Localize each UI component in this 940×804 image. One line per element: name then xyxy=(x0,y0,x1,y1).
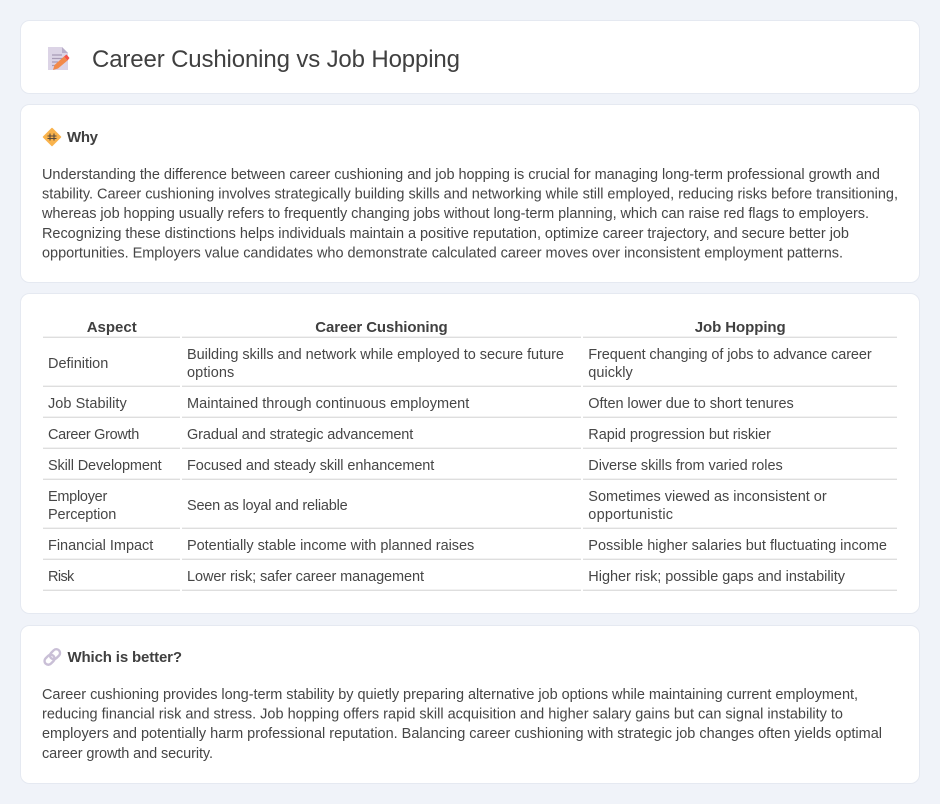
row: financial impact: Possible higher salaries but fluctuating income xyxy=(588,538,887,554)
heading: why: Why xyxy=(67,129,99,146)
row: employer perception: Sometimes viewed as inconsistent or xyxy=(588,489,827,505)
row: job stability xyxy=(43,396,897,417)
row: employer perception xyxy=(43,489,897,528)
row: career growth xyxy=(43,427,897,448)
row: definition: Building skills and network while employed to secure future xyxy=(187,347,564,363)
panel: why xyxy=(20,104,920,282)
table header row xyxy=(43,319,897,337)
row: career growth: Rapid progression but riskier xyxy=(588,427,771,443)
row: career growth: Career Growth xyxy=(48,427,139,443)
text block: why explanation: Understanding the difference between career cushioning and job hopping is crucial for managing long-term professional growth and xyxy=(42,167,880,183)
table header row: Aspect xyxy=(87,319,137,336)
icon: chain link xyxy=(43,648,62,666)
row: employer perception: Employer xyxy=(48,489,107,505)
row: definition: options xyxy=(187,365,234,381)
icon: warning diamond xyxy=(44,128,60,146)
heading: which is better: Which is better? xyxy=(68,649,182,666)
row: employer perception: Perception xyxy=(48,507,116,523)
table header row: Job Hopping xyxy=(695,319,786,336)
icon: document with pencil xyxy=(48,47,70,70)
row: risk: Lower risk; safer career management xyxy=(187,569,424,585)
row: skill development: Focused and steady skill enhancement xyxy=(187,458,434,474)
row: job stability: Often lower due to short tenures xyxy=(588,396,794,412)
row: employer perception: Seen as loyal and reliable xyxy=(187,498,348,514)
title: Career Cushioning vs Job Hopping xyxy=(92,46,460,73)
text block: verdict xyxy=(42,687,882,762)
panel: which is better xyxy=(20,626,920,784)
row: definition: quickly xyxy=(588,365,633,381)
text block: why explanation: whereas job hopping usually refers to frequently changing jobs without long-term planning, which can raise red flags to employers. xyxy=(41,206,869,222)
row: skill development: Skill Development xyxy=(48,458,162,474)
row: risk: Higher risk; possible gaps and instability xyxy=(588,569,846,585)
text block: why explanation: stability. Career cushioning involves strategically building skills and networking while still employed, reducing risks before transitioning, xyxy=(42,187,898,203)
row: skill development xyxy=(43,458,897,479)
row: definition: Frequent changing of jobs to advance career xyxy=(588,347,872,363)
row: skill development: Diverse skills from varied roles xyxy=(588,458,783,474)
text block: verdict: employers and potentially harm professional reputation. Balancing career cushioning with strategic job changes often yields optimal xyxy=(42,726,882,742)
row: job stability: Job Stability xyxy=(48,396,127,412)
row: definition: Definition xyxy=(48,356,108,372)
text block: verdict: reducing financial risk and stress. Job hopping offers rapid skill acquisition and higher salary gains but can signal instability to xyxy=(42,707,843,723)
row: job stability: Maintained through continuous employment xyxy=(187,396,469,412)
text block: why explanation: opportunities. Employers value candidates who demonstrate calculated career moves over inconsistent employment patterns. xyxy=(42,245,843,261)
text block: why explanation: Recognizing these distinctions helps individuals maintain a positive reputation, optimize career trajectory, and secure better job xyxy=(42,226,849,242)
text block: verdict: Career cushioning provides long-term stability by quietly preparing alternative job options while maintaining current employment, xyxy=(42,687,858,703)
panel: page header xyxy=(20,20,920,94)
row: risk: Risk xyxy=(48,569,75,585)
panel: comparison table xyxy=(20,294,920,614)
row: financial impact: Financial Impact xyxy=(48,538,153,554)
row: risk xyxy=(43,569,897,590)
row: career growth: Gradual and strategic advancement xyxy=(187,427,413,443)
text block: why explanation xyxy=(41,167,898,261)
text block: verdict: career growth and security. xyxy=(42,746,213,762)
row: employer perception: opportunistic xyxy=(588,507,673,523)
row: financial impact xyxy=(43,538,897,559)
table header row: Career Cushioning xyxy=(315,319,448,336)
row: definition xyxy=(43,347,897,386)
row: financial impact: Potentially stable income with planned raises xyxy=(187,538,474,554)
